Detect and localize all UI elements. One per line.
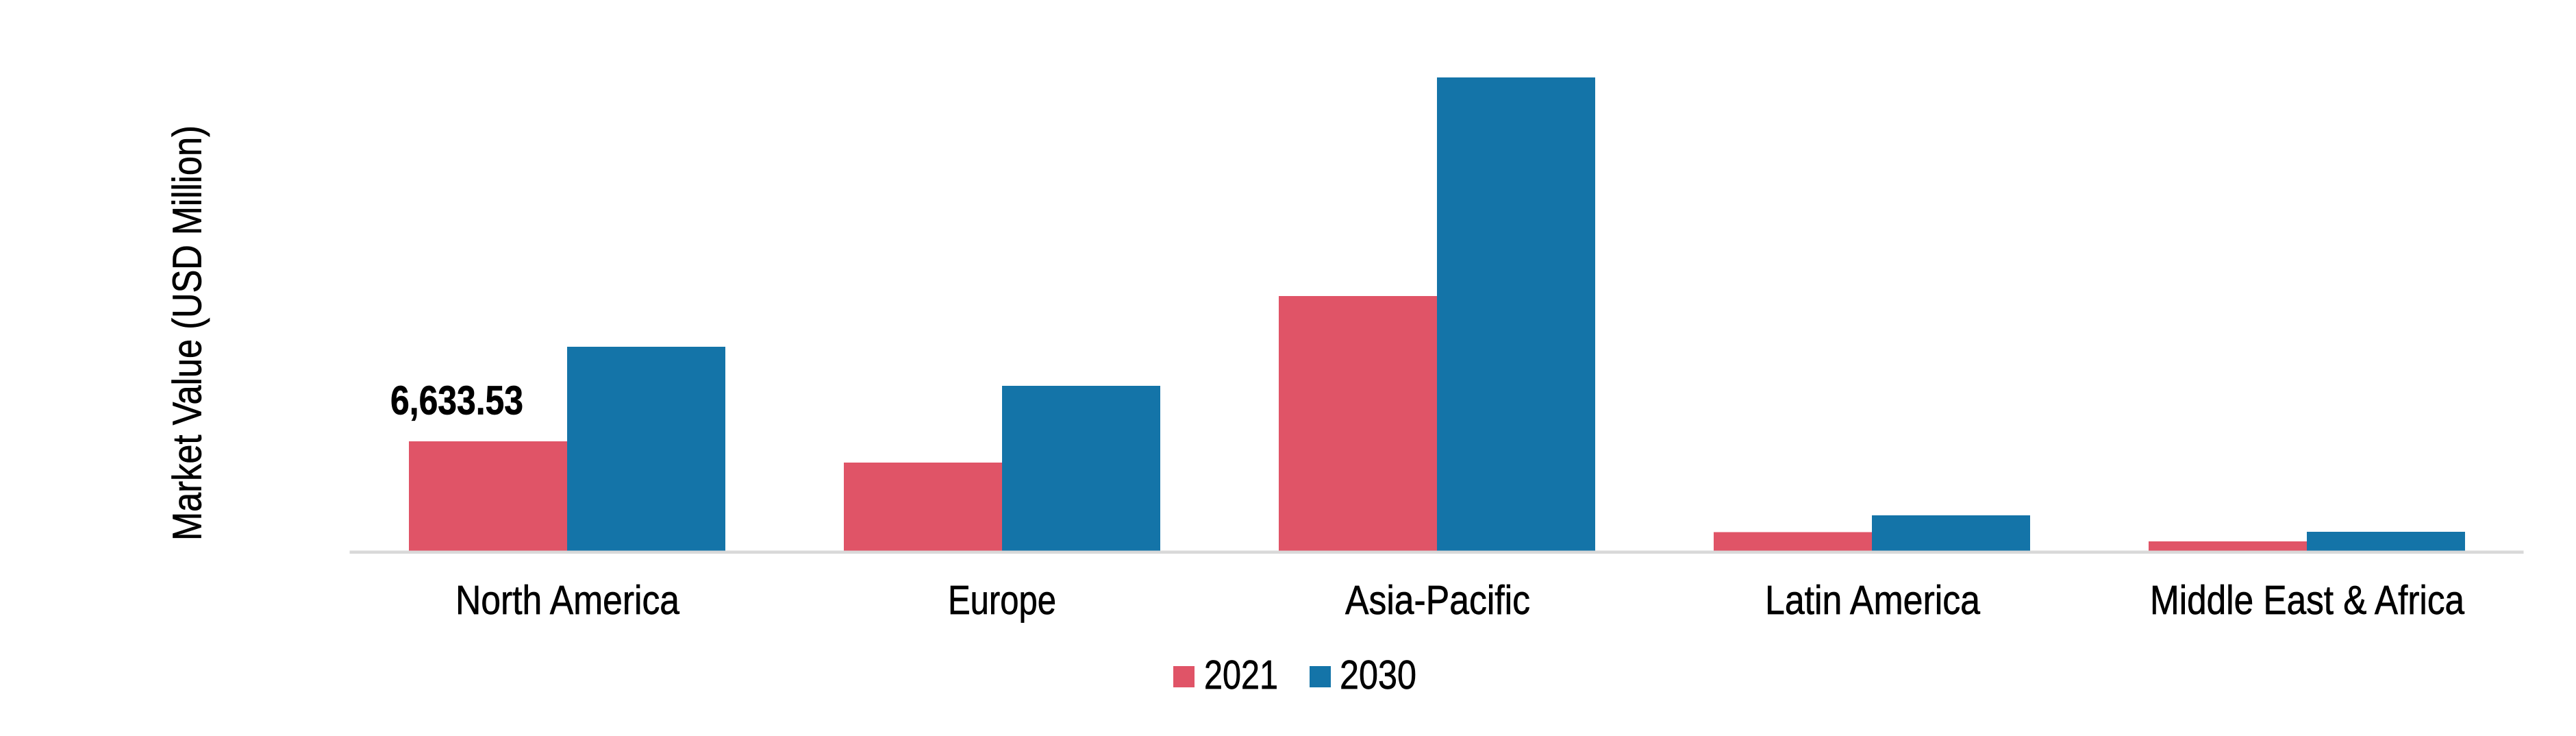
group: Asia-Pacific bbox=[1279, 77, 1595, 623]
bar: North America 2030 bbox=[567, 347, 725, 551]
legend bbox=[1173, 652, 1416, 698]
group: Middle East & Africa bbox=[2149, 532, 2465, 623]
bar: Europe 2030 bbox=[1002, 386, 1160, 551]
category label: Latin America: Latin America bbox=[1765, 578, 1980, 623]
bar: Asia-Pacific 2021 bbox=[1279, 296, 1437, 551]
group: Europe bbox=[844, 386, 1160, 623]
category label: Middle East & Africa: Middle East & Africa bbox=[2150, 578, 2464, 623]
legend label: 2021: 2021 bbox=[1204, 652, 1278, 698]
category label: North America: North America bbox=[455, 578, 679, 623]
group: North America bbox=[390, 347, 725, 623]
bar: Europe 2021 bbox=[844, 463, 1002, 551]
y-axis title: Market Value (USD Million) bbox=[164, 125, 210, 541]
legend label: 2030: 2030 bbox=[1340, 652, 1416, 698]
category label: Asia-Pacific: Asia-Pacific bbox=[1345, 578, 1530, 623]
bar: Latin America 2021 bbox=[1714, 532, 1872, 551]
bar: Asia-Pacific 2030 bbox=[1437, 77, 1595, 551]
x-axis line bbox=[349, 550, 2523, 554]
bar: Middle East & Africa 2030 bbox=[2307, 532, 2465, 551]
legend swatch: 2021 bbox=[1173, 666, 1195, 687]
legend swatch: 2030 bbox=[1310, 666, 1331, 687]
bar: Middle East & Africa 2021 bbox=[2149, 541, 2307, 551]
data label: North America 2021: 6,633.53 bbox=[390, 378, 523, 424]
bar: North America 2021 bbox=[409, 441, 567, 551]
category label: Europe: Europe bbox=[948, 578, 1056, 623]
bar: Latin America 2030 bbox=[1872, 515, 2030, 551]
group: Latin America bbox=[1714, 515, 2030, 623]
